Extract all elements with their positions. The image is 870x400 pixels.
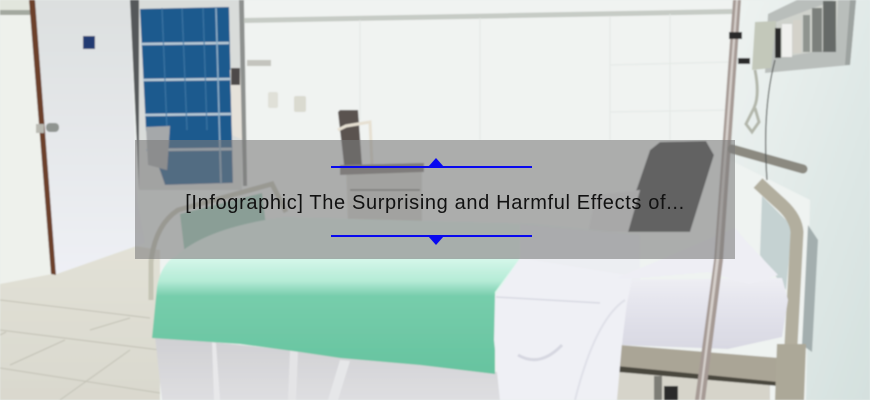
pillow — [617, 228, 778, 284]
bed footboard — [151, 184, 286, 300]
mattress — [622, 278, 788, 349]
headboard — [758, 183, 818, 352]
title banner — [135, 140, 735, 259]
iv pole — [695, 0, 742, 400]
title text: [Infographic] The Surprising and Harmful Effects of... — [185, 192, 685, 214]
floor tiles — [0, 246, 160, 400]
bed top surface — [160, 217, 640, 300]
green blanket — [152, 258, 520, 374]
wall chair and nightstand — [338, 110, 424, 226]
back wall — [244, 0, 732, 240]
bed frame — [610, 344, 806, 400]
left wall — [0, 0, 50, 290]
wall rail — [732, 149, 803, 169]
bottom rule with downward triangle — [331, 235, 532, 245]
armchair — [588, 141, 714, 232]
wall phone — [738, 21, 781, 180]
wall service panel — [765, 0, 856, 73]
skirt of bed — [155, 336, 500, 400]
window frame — [130, 0, 150, 190]
right wall — [730, 0, 870, 400]
top rule with upward triangle — [331, 158, 532, 168]
blue pillar — [140, 7, 243, 185]
door — [29, 0, 145, 275]
white sheet — [494, 258, 632, 400]
